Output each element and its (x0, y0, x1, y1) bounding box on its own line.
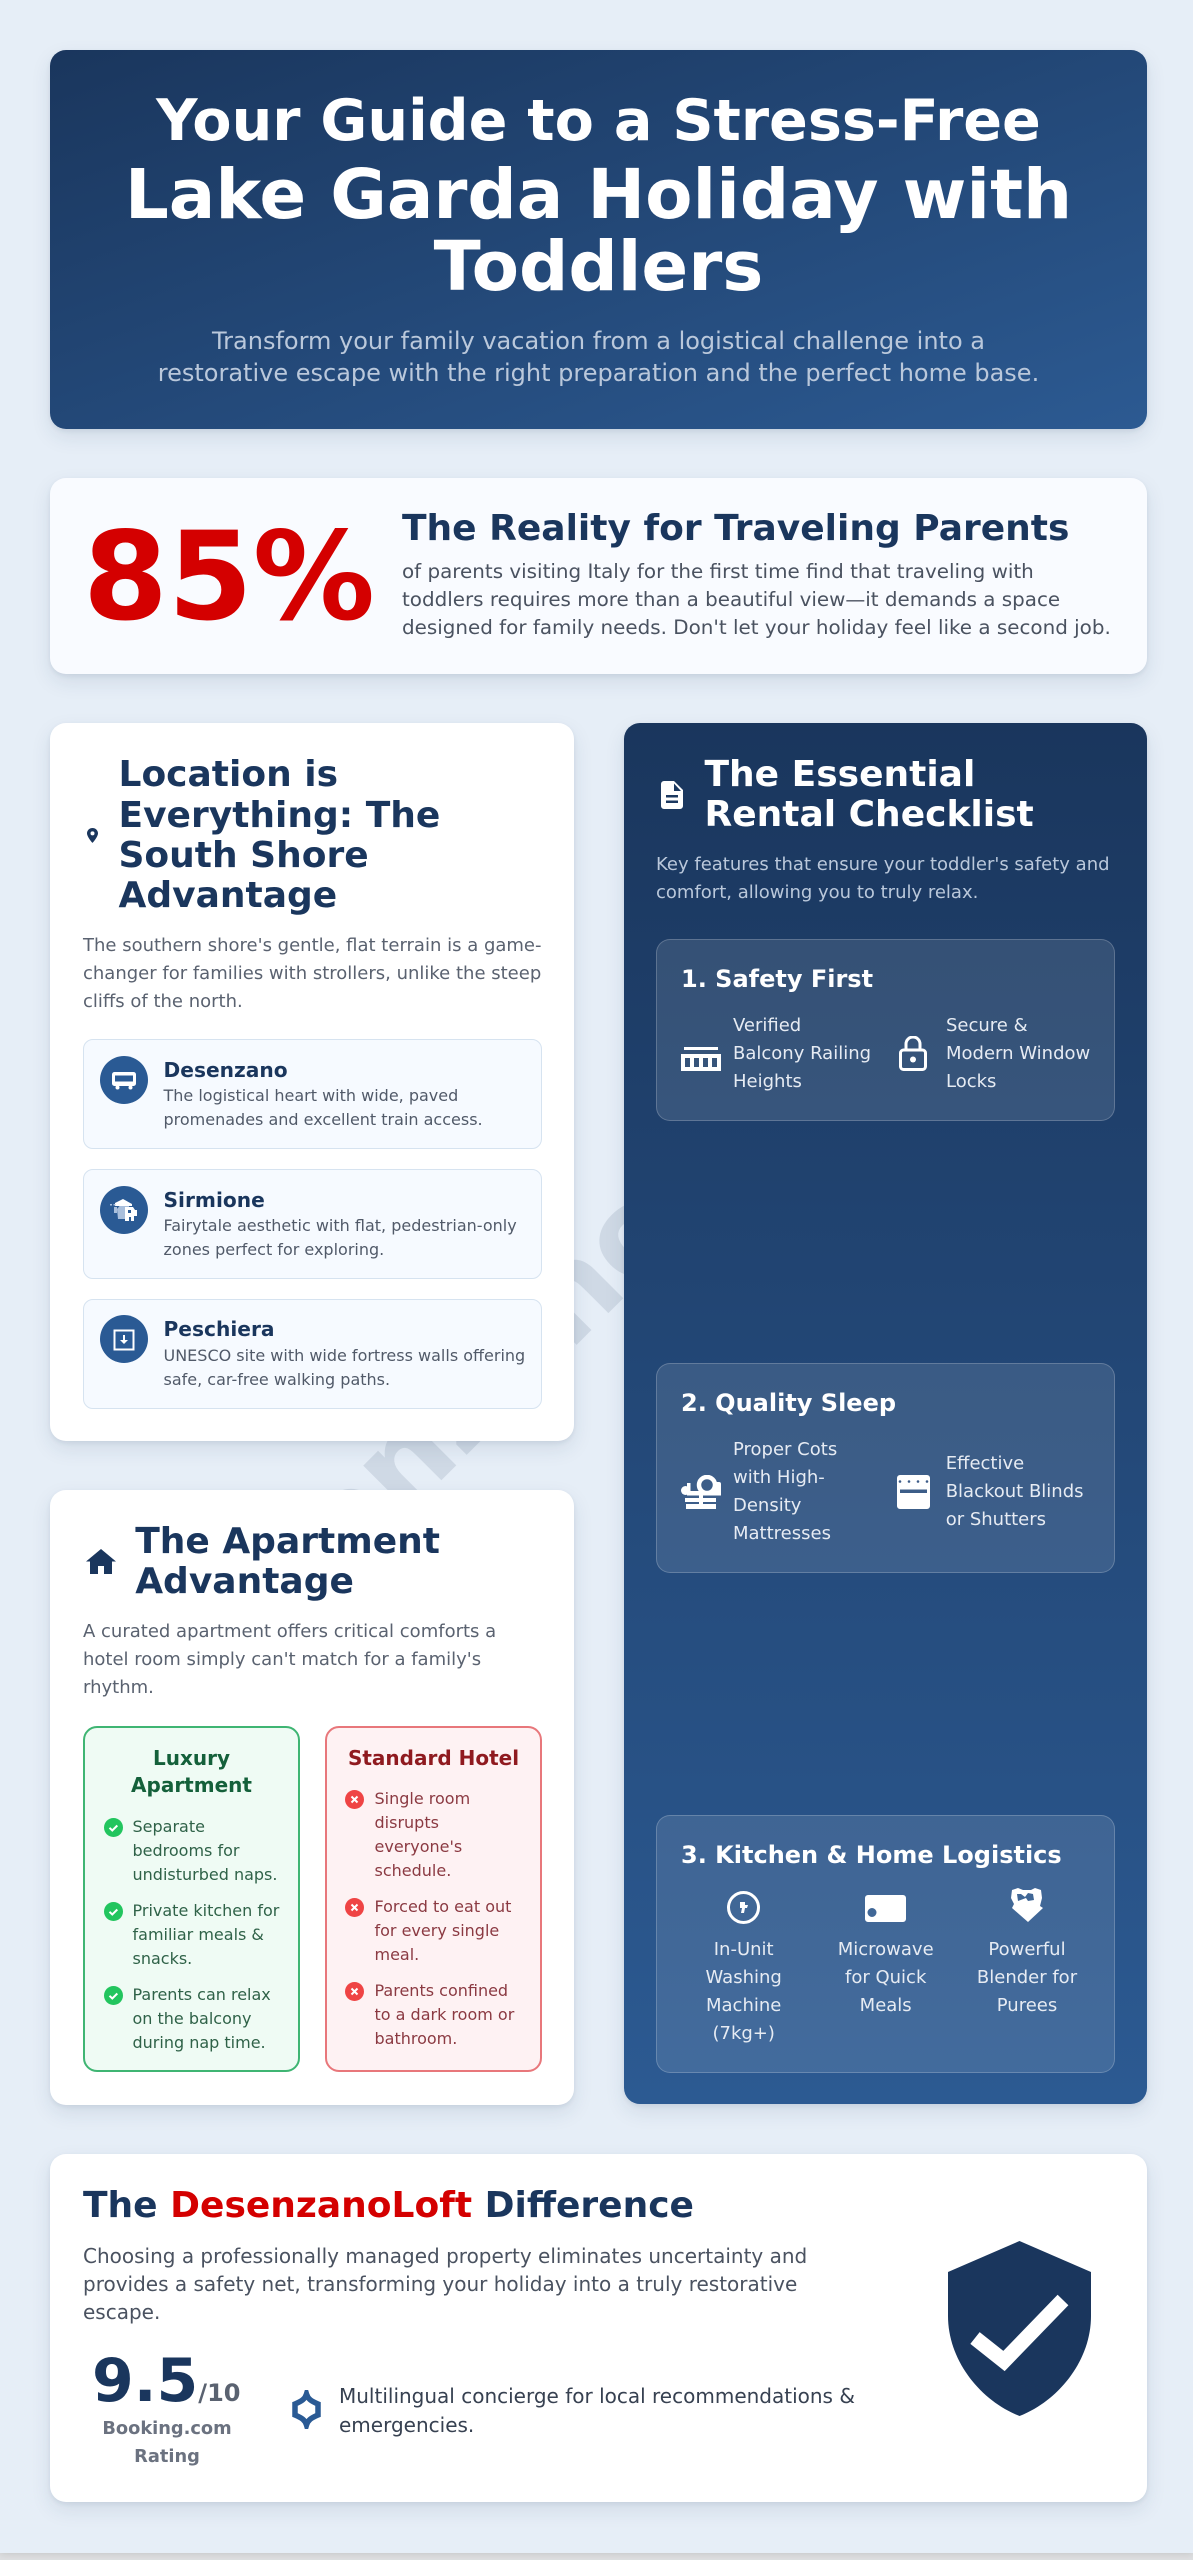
icon: fortress gate (100, 1315, 148, 1363)
checklist group: quality sleep: or Shutters (946, 1509, 1046, 1530)
checklist group: safety first: Heights (733, 1071, 802, 1092)
comparison: luxury apartment: during nap time. (132, 2033, 266, 2052)
comparison: standard hotel (325, 1726, 542, 2072)
checklist group: kitchen and home logistics: Microwave (838, 1939, 934, 1960)
statistic text: of parents visiting Italy for the first time find that traveling with (402, 560, 1034, 583)
checklist group: quality sleep: Density (733, 1495, 801, 1516)
comparison: standard hotel: everyone's (374, 1837, 462, 1856)
town: Peschiera (83, 1298, 542, 1408)
comparison: standard hotel: Standard Hotel (348, 1746, 519, 1770)
town: Sirmione: Fairytale aesthetic with flat, pedestrian-only (164, 1216, 517, 1235)
big number 85%: 85% (83, 506, 375, 648)
town: Desenzano: promenades and excellent train access. (164, 1110, 483, 1129)
comparison: standard hotel: Parents confined (374, 1981, 508, 2000)
checklist text: Key features that ensure your toddler's safety and (656, 854, 1110, 874)
icon: train (100, 1056, 148, 1104)
apartment heading: Advantage (135, 1560, 354, 1602)
rating label: Rating (134, 2446, 200, 2467)
checklist group: quality sleep (656, 1363, 1114, 1573)
difference text: provides a safety net, transforming your holiday into a truly restorative (83, 2272, 797, 2296)
checklist group: safety first: Locks (946, 1071, 996, 1092)
checklist group: kitchen and home logistics: Powerful (988, 1939, 1066, 1960)
icon: castle (100, 1186, 148, 1234)
comparison: luxury apartment: familiar meals & (132, 1925, 264, 1944)
comparison: luxury apartment: Apartment (131, 1773, 252, 1797)
subtitle: restorative escape with the right preparation and the perfect home base. (158, 359, 1039, 387)
panel: reality statistic (50, 478, 1147, 674)
difference heading: The DesenzanoLoft Difference (83, 2185, 694, 2226)
checklist group: safety first: Secure & (946, 1015, 1028, 1036)
town: Peschiera: Peschiera (164, 1317, 275, 1341)
concierge text: Multilingual concierge for local recommendations & (339, 2384, 855, 2408)
apartment text: hotel room simply can't match for a family's (83, 1649, 481, 1670)
checklist heading: Rental Checklist (704, 794, 1034, 835)
town: Desenzano (83, 1039, 542, 1149)
icon: cot (681, 1475, 721, 1509)
concierge text: emergencies. (339, 2413, 474, 2437)
checklist group: kitchen and home logistics: Purees (997, 1995, 1057, 2016)
icon: cross (345, 1790, 364, 1809)
concierge text (339, 2384, 855, 2437)
checklist group: quality sleep: Effective (946, 1453, 1024, 1474)
header banner (50, 50, 1147, 429)
subtitle: Transform your family vacation from a logistical challenge into a (212, 327, 985, 355)
comparison: standard hotel: to a dark room or (374, 2005, 514, 2024)
statistic text (402, 560, 1111, 639)
comparison: luxury apartment: Parents can relax (132, 1985, 271, 2004)
checklist group: kitchen and home logistics: Machine (706, 1995, 781, 2016)
town: Sirmione (83, 1169, 542, 1279)
icon: blackout blinds (897, 1475, 930, 1509)
statistic text: toddlers requires more than a beautiful view—it demands a space (402, 588, 1060, 611)
comparison: standard hotel: for every single (374, 1921, 499, 1940)
location text: The southern shore's gentle, flat terrain is a game- (83, 935, 542, 956)
comparison: standard hotel: Forced to eat out (374, 1897, 511, 1916)
comparison: luxury apartment (83, 1726, 300, 2072)
icon: microwave (865, 1895, 906, 1922)
comparison: standard hotel: Single room (374, 1789, 470, 1808)
town: Sirmione: Sirmione (164, 1188, 265, 1212)
icon: balcony railing (681, 1047, 721, 1071)
title: Lake Garda Holiday with (125, 155, 1072, 235)
rating label: Booking.com (102, 2418, 232, 2439)
checklist heading (704, 754, 1034, 835)
background watermark: DesenzanoLoft (89, 966, 899, 1776)
town: Peschiera: safe, car-free walking paths. (164, 1370, 390, 1388)
comparison: luxury apartment: snacks. (132, 1949, 192, 1968)
title (125, 88, 1072, 307)
comparison: standard hotel: meal. (374, 1945, 419, 1964)
comparison: luxury apartment: Private kitchen for (132, 1901, 279, 1920)
comparison: standard hotel: bathroom. (374, 2029, 457, 2048)
checklist group: safety first: Balcony Railing (733, 1043, 871, 1064)
statistic text: designed for family needs. Don't let your holiday feel like a second job. (402, 616, 1111, 639)
checklist group: kitchen and home logistics: for Quick (845, 1967, 926, 1988)
apartment text: rhythm. (83, 1677, 154, 1698)
checklist group: safety first (656, 939, 1114, 1121)
apartment heading: The Apartment (135, 1520, 440, 1562)
icon: washing machine (727, 1891, 760, 1924)
location text: cliffs of the north. (83, 991, 243, 1012)
checklist heading: The Essential (704, 754, 975, 795)
apartment text (83, 1621, 496, 1698)
difference text (83, 2244, 807, 2324)
rating score: 9.5/10 (92, 2346, 240, 2416)
checklist group: kitchen and home logistics: In-Unit (714, 1939, 774, 1960)
checklist text: comfort, allowing you to truly relax. (656, 882, 978, 902)
location heading: Location is (118, 754, 338, 795)
subtitle (158, 327, 1039, 387)
town: Desenzano: Desenzano (164, 1058, 288, 1082)
panel: DesenzanoLoft difference (50, 2154, 1147, 2502)
location text: changer for families with strollers, unlike the steep (83, 963, 541, 984)
rating label (102, 2418, 232, 2467)
checklist group: safety first: 1. Safety First (681, 965, 873, 993)
icon: document (661, 781, 683, 809)
checklist group: kitchen and home logistics: Meals (860, 1995, 912, 2016)
comparison: standard hotel: schedule. (374, 1861, 451, 1880)
title: Toddlers (434, 227, 763, 307)
icon: check (104, 1986, 123, 2005)
icon: blender (1011, 1888, 1043, 1922)
checklist group: quality sleep: Proper Cots (733, 1439, 837, 1460)
apartment text: A curated apartment offers critical comforts a (83, 1621, 496, 1642)
checklist group: kitchen and home logistics: 3. Kitchen & Home Logistics (681, 1841, 1062, 1869)
checklist group: kitchen and home logistics: (7kg+) (712, 2023, 775, 2044)
icon: check (104, 1902, 123, 1921)
checklist group: safety first: Verified (733, 1015, 801, 1036)
difference text: escape. (83, 2300, 160, 2324)
checklist group: quality sleep: Blackout Blinds (946, 1481, 1084, 1502)
comparison: luxury apartment: bedrooms for (132, 1841, 239, 1860)
comparison: luxury apartment: undisturbed naps. (132, 1865, 277, 1884)
town: Peschiera: UNESCO site with wide fortress walls offering (164, 1346, 525, 1364)
title: Your Guide to a Stress-Free (156, 88, 1041, 154)
checklist group: quality sleep: 2. Quality Sleep (681, 1389, 896, 1417)
checklist group: kitchen and home logistics: Blender for (977, 1967, 1077, 1988)
icon: house (86, 1549, 116, 1574)
panel: location (50, 723, 574, 1441)
checklist group: safety first: Modern Window (946, 1043, 1090, 1064)
difference text: Choosing a professionally managed property eliminates uncertainty and (83, 2244, 807, 2268)
icon: shield check (948, 2241, 1091, 2416)
location heading: Everything: The (118, 795, 440, 836)
icon: cross (345, 1982, 364, 2001)
checklist text (656, 854, 1110, 902)
comparison: luxury apartment: Separate (132, 1817, 205, 1836)
apartment heading (135, 1520, 440, 1602)
statistic heading: The Reality for Traveling Parents (402, 508, 1069, 549)
town: Sirmione: zones perfect for exploring. (164, 1240, 384, 1259)
location heading (118, 754, 440, 916)
icon: check (104, 1818, 123, 1837)
panel: apartment advantage (50, 1490, 574, 2105)
icon: map pin (87, 828, 98, 843)
icon: cross (345, 1898, 364, 1917)
location text (82, 935, 542, 1012)
comparison: luxury apartment: on the balcony (132, 2009, 251, 2028)
checklist group: quality sleep: with High- (733, 1467, 825, 1488)
comparison: standard hotel: disrupts (374, 1813, 439, 1832)
comparison: luxury apartment: Luxury (153, 1746, 230, 1770)
panel: rental checklist (624, 723, 1147, 2104)
icon: concierge (292, 2390, 321, 2429)
checklist group: kitchen and home logistics (656, 1815, 1114, 2073)
town: Desenzano: The logistical heart with wide, paved (164, 1086, 458, 1105)
checklist group: kitchen and home logistics: Washing (706, 1967, 782, 1988)
location heading: South Shore (118, 835, 369, 876)
icon: lock (899, 1036, 927, 1071)
location heading: Advantage (118, 875, 337, 916)
checklist group: quality sleep: Mattresses (733, 1523, 831, 1544)
